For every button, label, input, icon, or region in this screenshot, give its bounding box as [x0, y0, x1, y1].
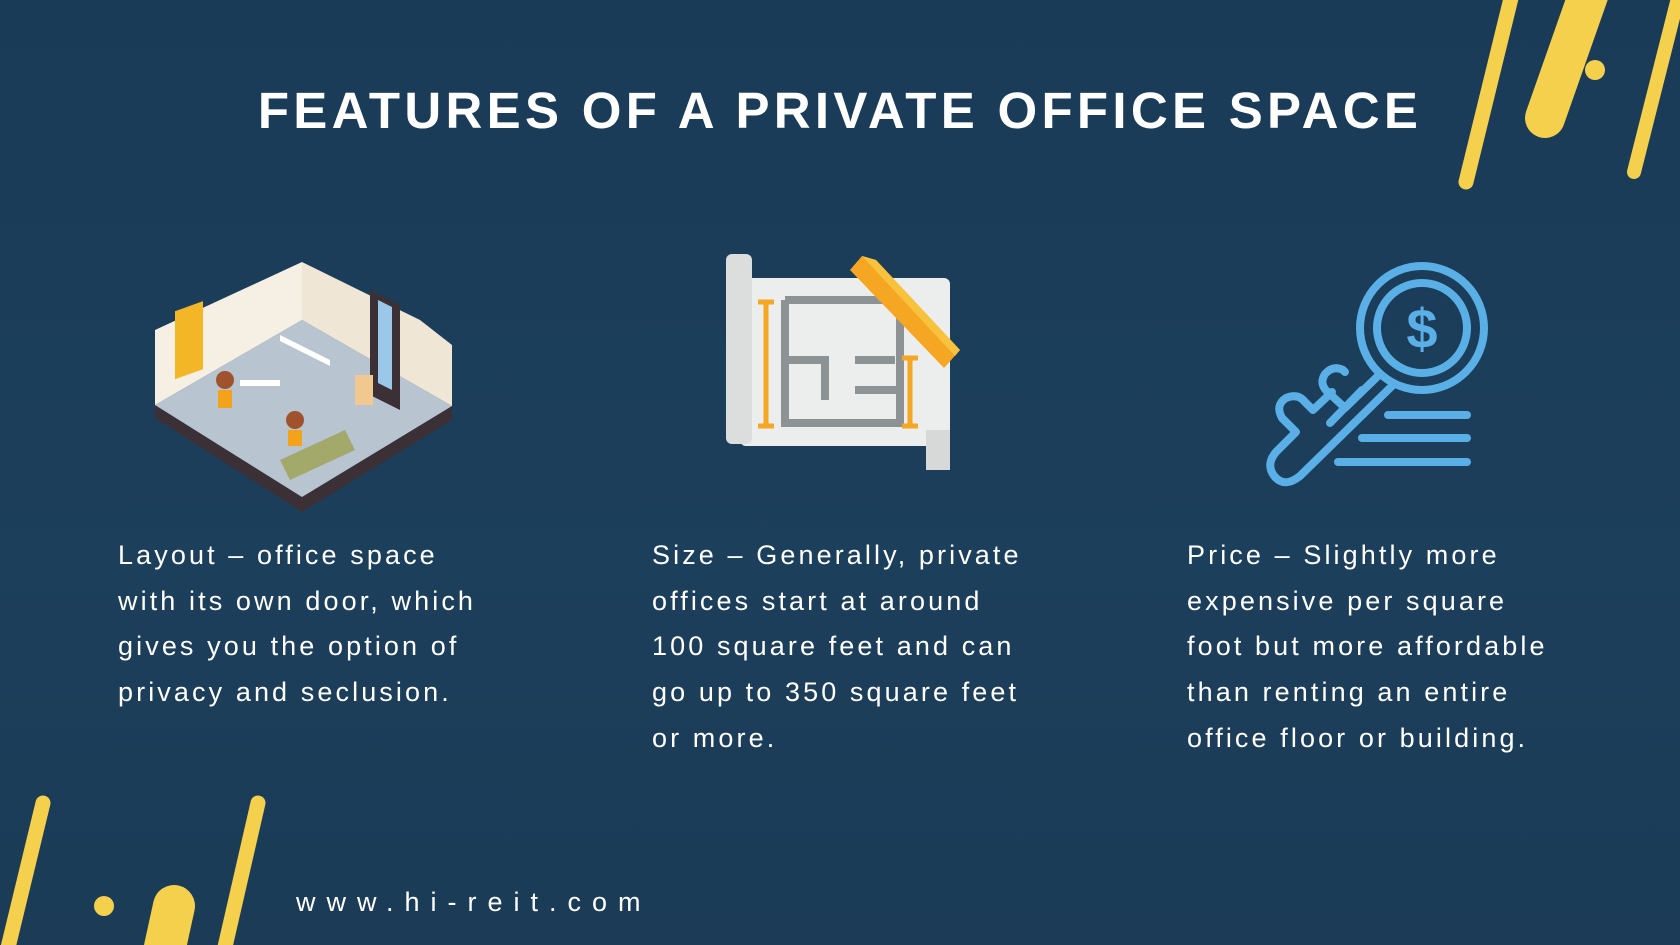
text: layout [118, 540, 476, 707]
text: size: offices start at around [652, 586, 982, 616]
text: size [652, 540, 1022, 753]
text: layout: Layout – office space [118, 540, 438, 570]
text: size: 100 square feet and can [652, 631, 1015, 661]
url: www.hi-reit.com [296, 887, 652, 917]
text: size: or more. [652, 723, 777, 753]
text: price: foot but more affordable [1187, 631, 1548, 661]
text: layout: gives you the option of [118, 631, 459, 661]
text: layout: privacy and seclusion. [118, 677, 452, 707]
text: price: than renting an entire [1187, 677, 1510, 707]
title: FEATURES OF A PRIVATE OFFICE SPACE [258, 82, 1422, 139]
text: price [1187, 540, 1548, 753]
text: price: Price – Slightly more [1187, 540, 1500, 570]
icon: key with dollar: $ [1406, 297, 1438, 360]
text: price: office floor or building. [1187, 723, 1528, 753]
text: layout: with its own door, which [118, 586, 476, 616]
text: price: expensive per square [1187, 586, 1507, 616]
text: size: Size – Generally, private [652, 540, 1022, 570]
text: size: go up to 350 square feet [652, 677, 1019, 707]
